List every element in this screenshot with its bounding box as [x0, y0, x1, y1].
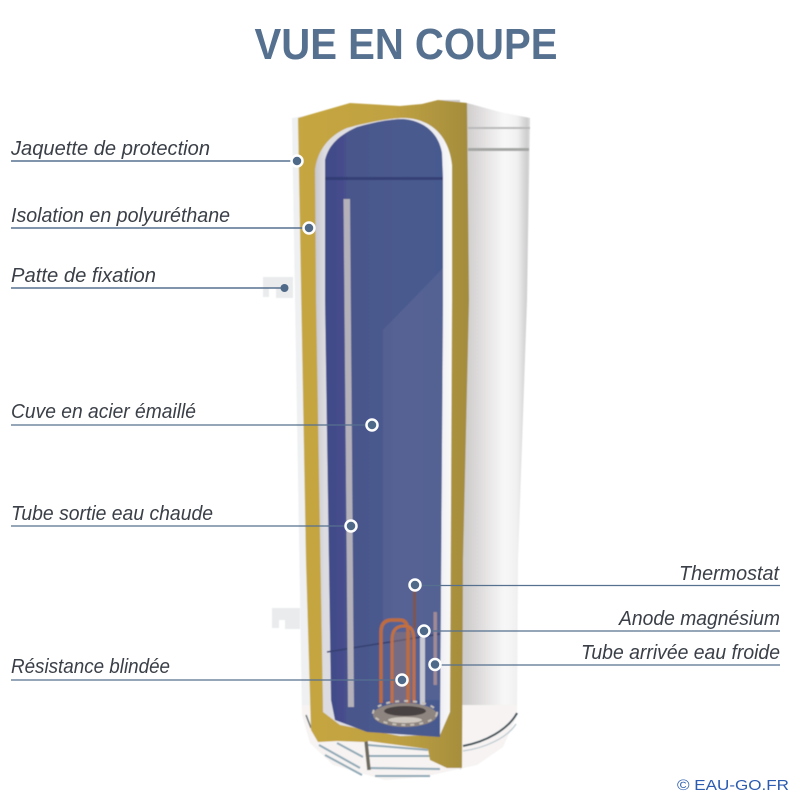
- outer jacket: right cylinder: [438, 100, 530, 770]
- label: Tube arrivée eau froide: [430, 642, 780, 670]
- water heater cutaway illustration: [263, 100, 530, 780]
- outer jacket: left edge: [292, 116, 312, 715]
- label: Patte de fixation: [11, 265, 288, 292]
- enamelled steel tank wall: [315, 118, 452, 736]
- base of cylinder with stripes: [302, 705, 517, 780]
- label: Cuve en acier émaillé: Cuve en acier émaillé: [11, 401, 196, 423]
- polyurethane insulation: [298, 100, 469, 768]
- label: Isolation en polyuréthane: Isolation en polyuréthane: [11, 205, 230, 227]
- label: Résistance blindée: Résistance blindée: [11, 656, 170, 678]
- right cylinder bands: [468, 127, 530, 151]
- label: Résistance blindée: [11, 656, 408, 686]
- label: Jaquette de protection: Jaquette de protection: [10, 138, 210, 160]
- heating element flange: [373, 701, 437, 727]
- label: Tube sortie eau chaude: [11, 503, 356, 532]
- tank interior: water: [325, 119, 443, 737]
- wall bracket: lower: [272, 608, 300, 629]
- label: Anode magnésium: [418, 608, 780, 636]
- dark band: [325, 177, 443, 180]
- shielded heating element: [381, 620, 414, 704]
- label: Patte de fixation: Patte de fixation: [11, 265, 156, 287]
- label: Cuve en acier émaillé: [11, 401, 378, 430]
- copyright credit: © EAU-GO.FR: [677, 777, 789, 794]
- label: Jaquette de protection: [10, 138, 302, 166]
- thermostat rod: [413, 590, 416, 628]
- label: Thermostat: Thermostat: [679, 563, 780, 585]
- lighter diagonal reflection: [383, 268, 443, 700]
- hot water outlet tube: [344, 199, 354, 707]
- label: Thermostat: [410, 563, 780, 590]
- cold water inlet tube: [434, 612, 437, 685]
- anode: [420, 637, 425, 705]
- title: VUE EN COUPE: [254, 20, 558, 69]
- wall bracket: upper: [263, 277, 293, 298]
- label: Tube sortie eau chaude: Tube sortie eau chaude: [11, 503, 213, 525]
- dark line near base: [327, 634, 440, 652]
- label: Anode magnésium: Anode magnésium: [618, 608, 780, 630]
- label: Isolation en polyuréthane: [11, 205, 314, 234]
- label: Tube arrivée eau froide: Tube arrivée eau froide: [581, 642, 780, 664]
